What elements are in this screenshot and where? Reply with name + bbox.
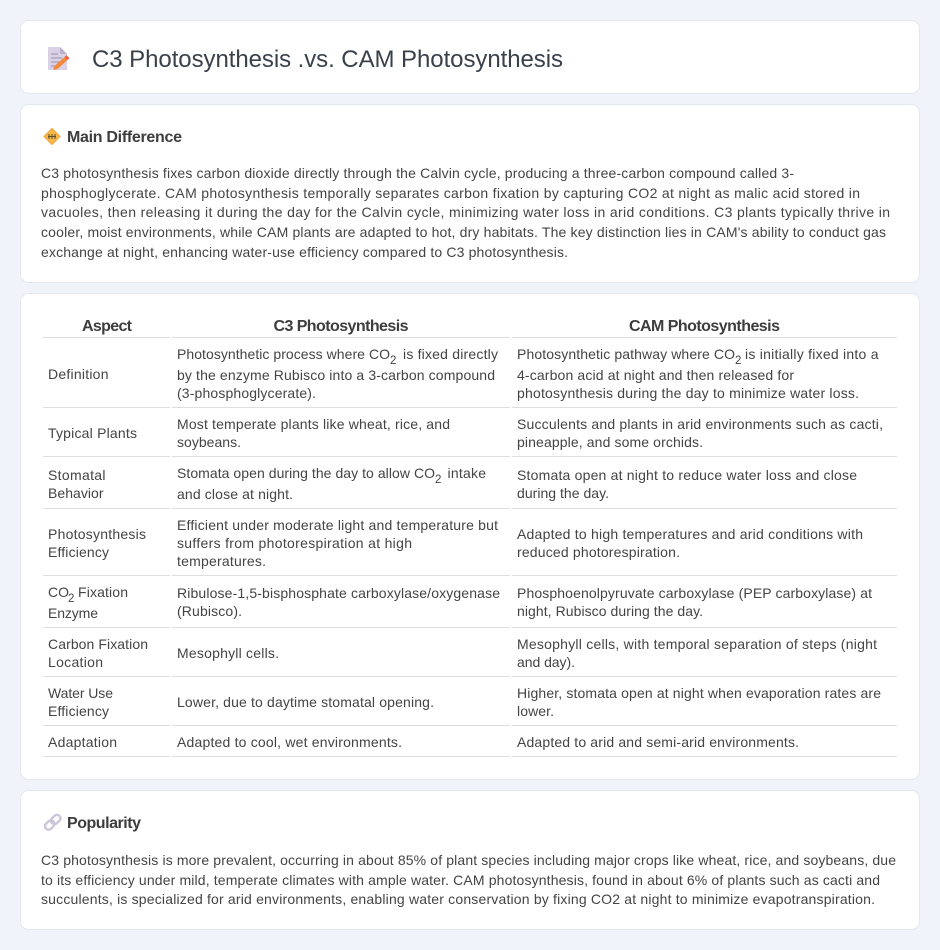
row: definition: (3-phosphoglycerate). <box>177 385 316 401</box>
panel: main difference <box>20 104 920 282</box>
row: adaptation: Adapted to arid and semi-arid environments. <box>517 734 799 750</box>
row: CO2 fixation enzyme: Enzyme <box>48 605 98 621</box>
row: stomatal behavior: 2 <box>435 474 441 486</box>
text block: popularity: C3 photosynthesis is more prevalent, occurring in about 85% of plant species including major crops like wheat, rice, and soybeans, due <box>41 852 896 868</box>
icon: chain link <box>44 813 62 831</box>
heading: popularity: Popularity <box>67 815 141 832</box>
row: carbon fixation location: Mesophyll cells, with temporal separation of steps (night <box>517 636 877 652</box>
row: water use efficiency: Efficiency <box>48 703 109 719</box>
row: definition: is fixed directly <box>403 346 498 362</box>
row: typical plants: Succulents and plants in arid environments such as cacti, <box>517 416 883 432</box>
panel: popularity <box>20 790 920 930</box>
row: definition <box>48 346 879 401</box>
row: carbon fixation location: Location <box>48 654 103 670</box>
row: definition: 4-carbon acid at night and then released for <box>517 367 794 383</box>
row: adaptation: Adaptation <box>48 734 117 750</box>
row: CO2 fixation enzyme: CO <box>48 584 69 600</box>
icon: warning diamond <box>44 128 60 144</box>
row: water use efficiency: Higher, stomata open at night when evaporation rates are <box>517 685 881 701</box>
row: carbon fixation location: Carbon Fixation <box>48 636 148 652</box>
row: definition: by the enzyme Rubisco into a 3-carbon compound <box>177 367 495 383</box>
row: photosynthesis efficiency: reduced photorespiration. <box>517 544 680 560</box>
row: definition: 2 <box>735 355 741 367</box>
row: CO2 fixation enzyme: (Rubisco). <box>177 603 242 619</box>
text block: main difference <box>41 165 890 260</box>
row: typical plants: Typical Plants <box>48 425 137 441</box>
row: definition: Definition <box>48 366 108 382</box>
icon: document with pencil <box>48 47 70 70</box>
row: stomatal behavior: and close at night. <box>177 486 293 502</box>
text block: popularity <box>41 852 896 907</box>
title: C3 Photosynthesis .vs. CAM Photosynthesis <box>92 46 563 73</box>
row: photosynthesis efficiency: suffers from photorespiration at high <box>177 535 412 551</box>
header panel <box>20 20 920 94</box>
row: CO2 fixation enzyme: Ribulose-1,5-bisphosphate carboxylase/oxygenase <box>177 585 500 601</box>
heading: main difference: Main Difference <box>67 129 182 146</box>
row: definition: photosynthesis during the day to minimize water loss. <box>517 385 859 401</box>
row: carbon fixation location: and day). <box>517 654 575 670</box>
row: photosynthesis efficiency: Efficiency <box>48 544 109 560</box>
row: CO2 fixation enzyme: Phosphoenolpyruvate carboxylase (PEP carboxylase) at <box>517 585 872 601</box>
row: water use efficiency: Water Use <box>48 685 113 701</box>
row: stomatal behavior: intake <box>448 465 486 481</box>
row: typical plants: pineapple, and some orchids. <box>517 434 703 450</box>
row: CO2 fixation enzyme <box>48 584 872 621</box>
row: water use efficiency <box>48 685 881 719</box>
row: carbon fixation location: Mesophyll cells. <box>177 645 279 661</box>
row: CO2 fixation enzyme: night, Rubisco during the day. <box>517 603 703 619</box>
row: typical plants <box>48 416 883 450</box>
row: typical plants: soybeans. <box>177 434 241 450</box>
row: typical plants: Most temperate plants like wheat, rice, and <box>177 416 450 432</box>
text block: popularity: succulents, is specialized for arid environments, enabling water conservation by fixing CO2 at night to minimize evapotranspiration. <box>41 891 875 907</box>
row: stomatal behavior: Stomata open during the day to allow CO <box>177 465 435 481</box>
row: adaptation <box>48 734 799 750</box>
table header row: C3 Photosynthesis <box>274 318 409 335</box>
row: adaptation: Adapted to cool, wet environments. <box>177 734 402 750</box>
row: photosynthesis efficiency: temperatures. <box>177 553 266 569</box>
row: water use efficiency: Lower, due to daytime stomatal opening. <box>177 694 434 710</box>
text block: main difference: exchange at night, enhancing water-use efficiency compared to C3 photosynthesis. <box>41 244 568 260</box>
row: stomatal behavior: during the day. <box>517 485 609 501</box>
panel: comparison table <box>20 294 920 780</box>
table header row: CAM Photosynthesis <box>629 318 780 335</box>
text block: main difference: C3 photosynthesis fixes carbon dioxide directly through the Calvin cycle, producing a three-carbon compound called 3- <box>41 165 794 181</box>
table header row <box>82 318 780 335</box>
row: CO2 fixation enzyme: 2 <box>68 593 74 605</box>
row: photosynthesis efficiency: Efficient under moderate light and temperature but <box>177 517 498 533</box>
text block: main difference: phosphoglycerate. CAM photosynthesis temporally separates carbon fixation by capturing CO2 at night as malic acid stored in <box>41 185 860 201</box>
row: stomatal behavior <box>48 465 857 502</box>
row: stomatal behavior: Behavior <box>48 485 104 501</box>
row: photosynthesis efficiency <box>48 517 863 569</box>
row: definition: Photosynthetic pathway where CO <box>517 346 735 362</box>
row: definition: is initially fixed into a <box>745 346 879 362</box>
row: carbon fixation location <box>48 636 877 670</box>
text block: main difference: vacuoles, then releasing it during the day for the Calvin cycle, minimizing water loss in arid conditions. C3 plants typically thrive in <box>41 204 890 220</box>
table header row: Aspect <box>82 318 133 335</box>
row: stomatal behavior: Stomatal <box>48 467 106 483</box>
row: photosynthesis efficiency: Adapted to high temperatures and arid conditions with <box>517 526 863 542</box>
row: water use efficiency: lower. <box>517 703 554 719</box>
text block: popularity: to its efficiency under mild, temperate climates with ample water. CAM photosynthesis, found in about 6% of plants such as cacti and <box>41 872 880 888</box>
row: definition: Photosynthetic process where CO <box>177 346 390 362</box>
row: stomatal behavior: Stomata open at night to reduce water loss and close <box>517 467 857 483</box>
text block: main difference: cooler, moist environments, while CAM plants are adapted to hot, dry habitats. The key distinction lies in CAM's ability to conduct gas <box>41 224 886 240</box>
row: photosynthesis efficiency: Photosynthesis <box>48 526 146 542</box>
row: definition: 2 <box>390 355 396 367</box>
row: CO2 fixation enzyme: Fixation <box>78 584 128 600</box>
